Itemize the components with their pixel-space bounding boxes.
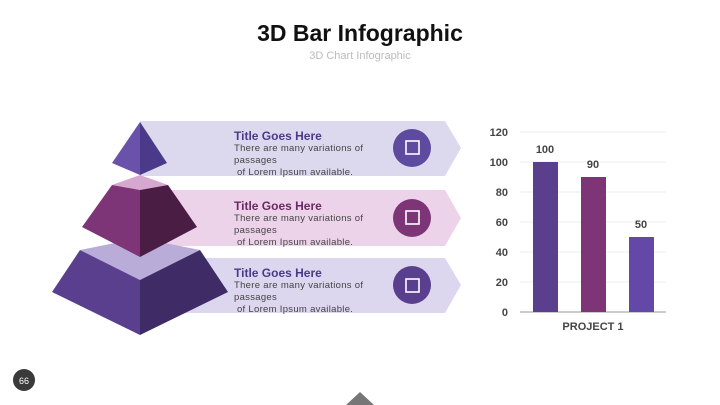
text block 3: There are many variations of: [234, 280, 363, 291]
text block 3: passages: [234, 292, 277, 303]
text block 1: There are many variations of: [234, 143, 363, 154]
bar chart: 120: [490, 127, 508, 139]
text block 3: [234, 266, 364, 315]
bottom marker: [346, 392, 374, 405]
text block 2: of Lorem Ipsum available.: [237, 237, 353, 248]
text block 1: passages: [234, 155, 277, 166]
subtitle: 3D Chart Infographic: [309, 50, 411, 62]
bar chart: 20: [496, 277, 508, 289]
text block 3: Title Goes Here: [234, 266, 322, 280]
pyramid bottom tier: [52, 238, 228, 335]
bar chart: 60: [496, 217, 508, 229]
banner 1: [140, 121, 461, 176]
bar chart: 90: [587, 159, 599, 171]
pyramid middle tier: [82, 175, 197, 257]
pyramid top tier: [112, 122, 167, 175]
text block 2: There are many variations of: [234, 213, 363, 224]
bar chart: 0: [502, 307, 508, 319]
bar chart: 50: [635, 219, 647, 231]
text block 1: [234, 129, 364, 178]
bar chart: [490, 127, 666, 333]
text block 3: of Lorem Ipsum available.: [237, 304, 353, 315]
bar chart: 100: [490, 157, 508, 169]
bar chart: PROJECT 1: [562, 321, 624, 333]
page number: 66: [19, 376, 29, 386]
title: 3D Bar Infographic: [257, 20, 463, 46]
text block 2: [234, 199, 364, 248]
banner 2: [140, 190, 461, 246]
bar chart: 100: [536, 144, 554, 156]
text block 2: Title Goes Here: [234, 199, 322, 213]
banner 3: [140, 258, 461, 313]
text block 1: of Lorem Ipsum available.: [237, 167, 353, 178]
text block 2: passages: [234, 225, 277, 236]
page number: [13, 369, 35, 391]
text block 1: Title Goes Here: [234, 129, 322, 143]
bar chart: 80: [496, 187, 508, 199]
bar chart: 40: [496, 247, 508, 259]
